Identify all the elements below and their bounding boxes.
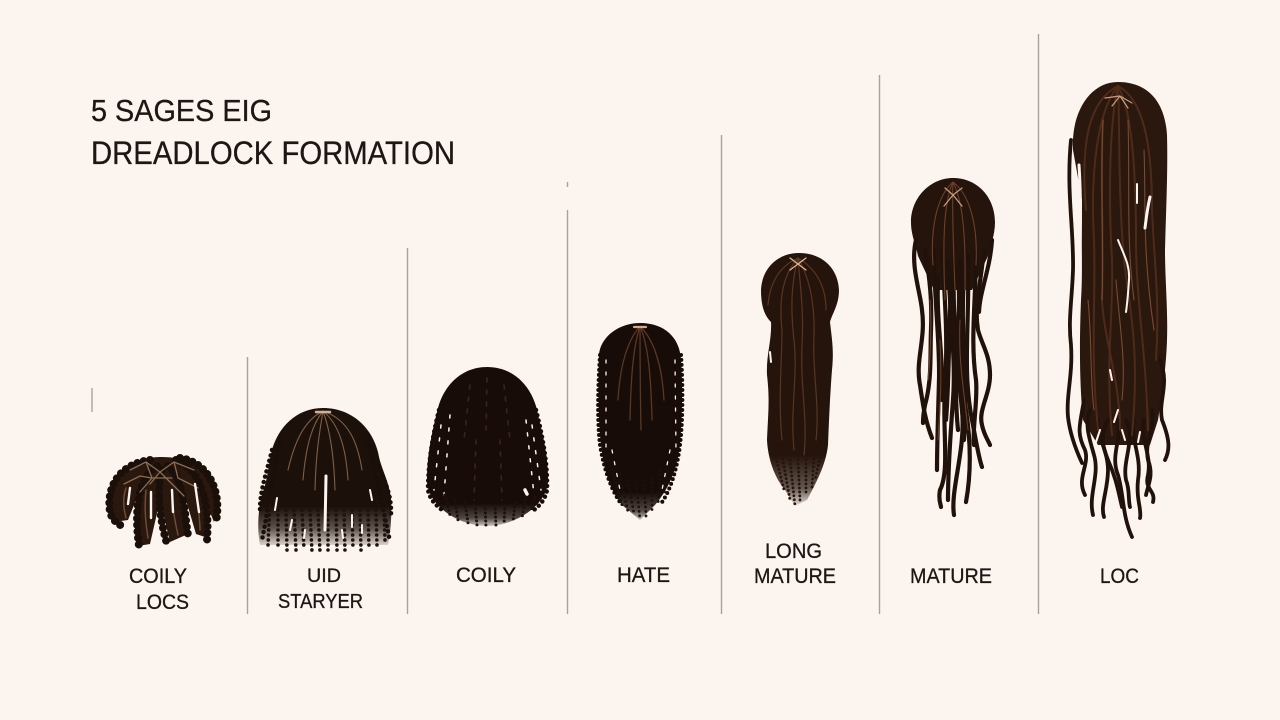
label: uid starter: STARYER bbox=[278, 591, 363, 613]
label: long mature: MATURE bbox=[754, 565, 836, 588]
label: hate: HATE bbox=[617, 564, 670, 587]
label: coily locs bbox=[129, 565, 189, 614]
title: DREADLOCK FORMATION bbox=[91, 135, 455, 171]
label: loc: LOC bbox=[1100, 565, 1139, 588]
label: uid starter: UID bbox=[307, 566, 341, 587]
label: coily locs: COILY bbox=[129, 565, 187, 588]
stage 1: coily locs hair bbox=[108, 457, 218, 546]
title bbox=[91, 93, 455, 171]
stage 6: mature hair bbox=[911, 178, 995, 515]
stage 4: hate hair bbox=[598, 323, 682, 520]
label: coily: COILY bbox=[456, 564, 516, 587]
label: mature: MATURE bbox=[910, 565, 992, 588]
stage 5: long mature hair bbox=[761, 253, 839, 506]
label: long mature bbox=[754, 540, 836, 588]
label: coily locs: LOCS bbox=[136, 591, 189, 614]
label: uid starter bbox=[278, 566, 363, 613]
stage 7: loc hair bbox=[1068, 82, 1168, 537]
label: long mature: LONG bbox=[765, 540, 822, 563]
stage 3: coily hair bbox=[427, 367, 548, 527]
title: 5 SAGES EIG bbox=[91, 93, 272, 128]
stage 2: uid starter hair bbox=[258, 408, 391, 552]
